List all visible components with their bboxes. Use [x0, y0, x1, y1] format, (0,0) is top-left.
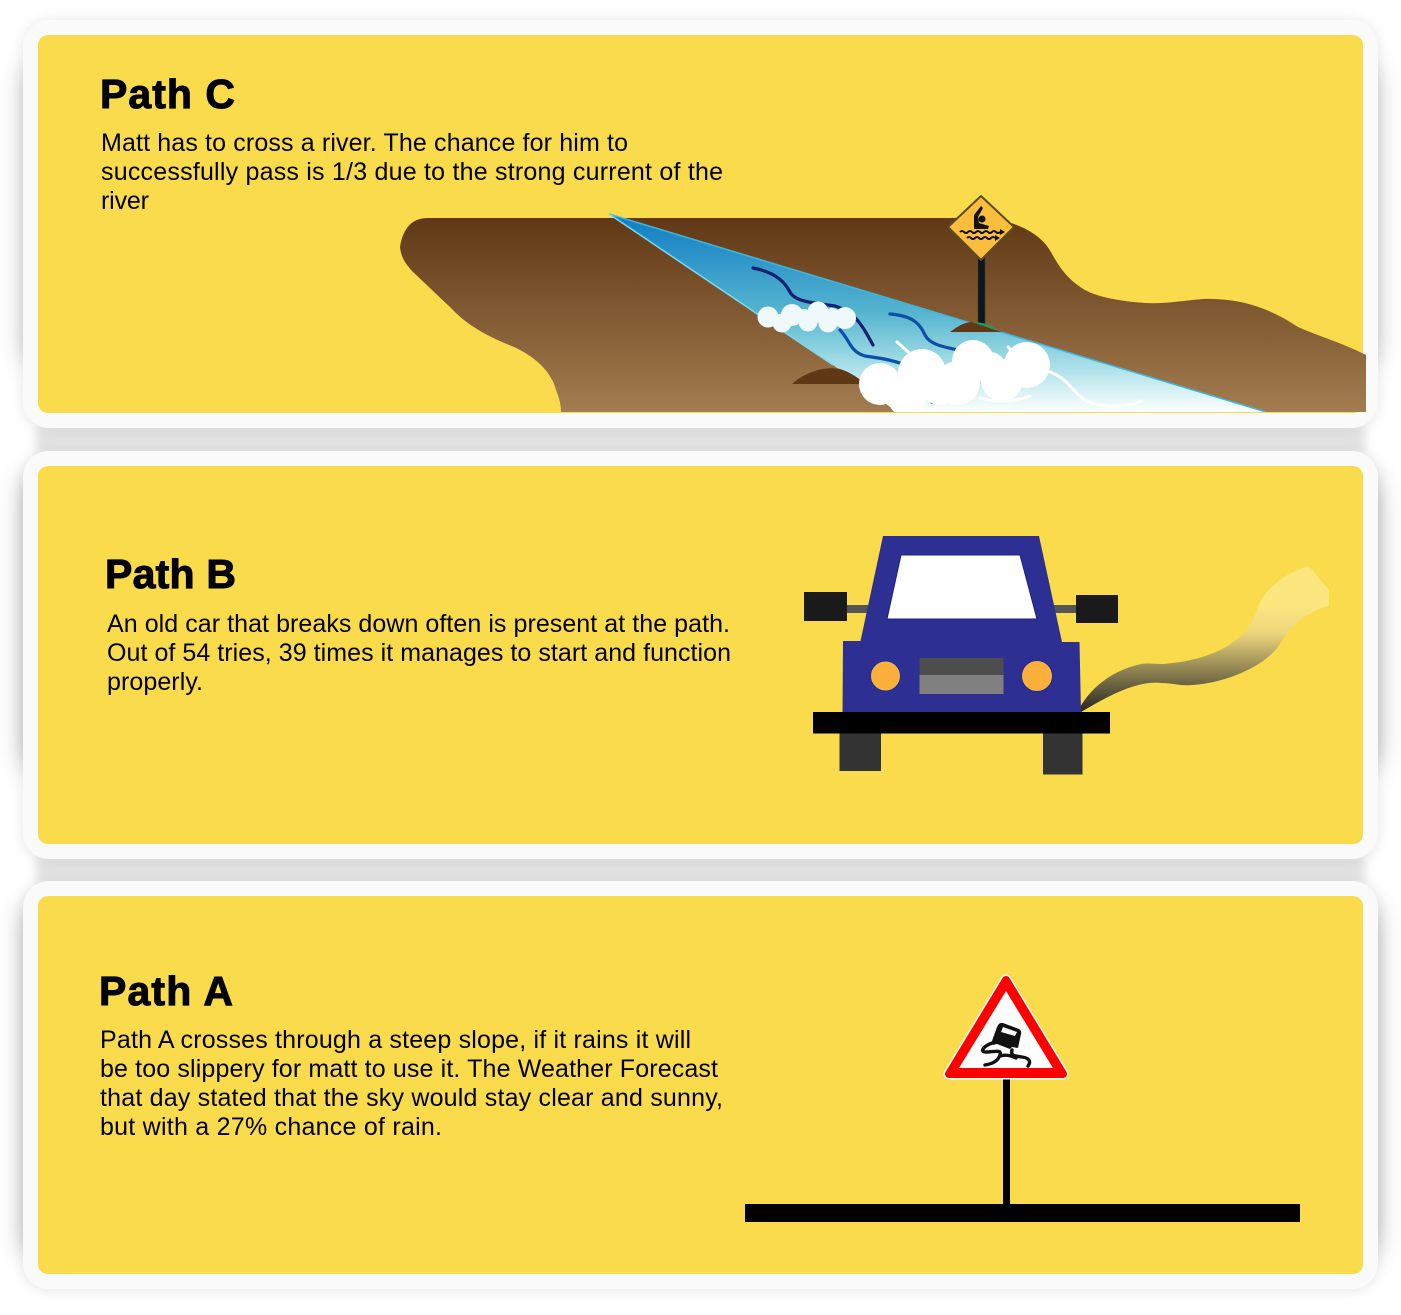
mirror arms [847, 605, 869, 613]
text: Path B description: An old car that breaks down often is present at the path. [107, 610, 730, 638]
river water [609, 214, 1266, 412]
small foam [758, 302, 856, 332]
sign border [949, 980, 1063, 1074]
left mirror [804, 592, 847, 621]
text: Path B description [107, 610, 731, 696]
exhaust smoke [1076, 566, 1329, 715]
illustration: old car with exhaust [804, 536, 1329, 774]
ground line [745, 1204, 1300, 1222]
text: Path A description [100, 1026, 723, 1141]
left wheel [840, 734, 881, 771]
text: Path C description [101, 129, 723, 215]
icon: skidding car [983, 1023, 1030, 1066]
heading: Path B: Path B [105, 551, 236, 597]
panel: Path B [23, 451, 1378, 859]
sign red triangle [949, 980, 1063, 1074]
text: Path B description: Out of 54 tries, 39 times it manages to start and function [107, 639, 731, 667]
illustration: river crossing [400, 196, 1366, 417]
text: Path C description: river [101, 187, 149, 215]
text: Path A description: Path A crosses through a steep slope, if it rains it will [100, 1026, 691, 1054]
heading: Path C: Path C [100, 71, 235, 117]
left headlight [870, 661, 900, 691]
panel: Path A [23, 881, 1378, 1289]
text: Path C description: successfully pass is 1/3 due to the strong current of the [101, 158, 723, 186]
sign post [978, 258, 985, 326]
windshield [887, 555, 1037, 619]
text: Path C description: Matt has to cross a river. The chance for him to [101, 129, 628, 157]
icon: swimmer warning sign [948, 196, 1014, 260]
text: Path A description: be too slippery for matt to use it. The Weather Forecast [100, 1055, 718, 1083]
right wheel [1043, 734, 1082, 774]
text: Path B description: properly. [107, 668, 203, 696]
illustration: slippery road sign [745, 980, 1300, 1222]
river bank [400, 218, 1366, 412]
text: Path A description: that day stated that the sky would stay clear and sunny, [100, 1084, 723, 1112]
right headlight [1022, 660, 1052, 692]
heading: Path A: Path A [99, 968, 233, 1014]
far-bank mound [792, 368, 866, 384]
bumper [813, 712, 1110, 734]
river current lines [753, 268, 1142, 406]
panel: Path C [23, 20, 1378, 428]
large foam [859, 340, 1050, 417]
near-bank mound [950, 322, 1002, 332]
text: Path A description: but with a 27% chance of rain. [100, 1113, 442, 1141]
sign pole [1003, 1078, 1010, 1205]
sign white centre [959, 991, 1053, 1068]
right mirror [1076, 595, 1118, 623]
grille [920, 658, 1004, 675]
car body [842, 536, 1081, 712]
